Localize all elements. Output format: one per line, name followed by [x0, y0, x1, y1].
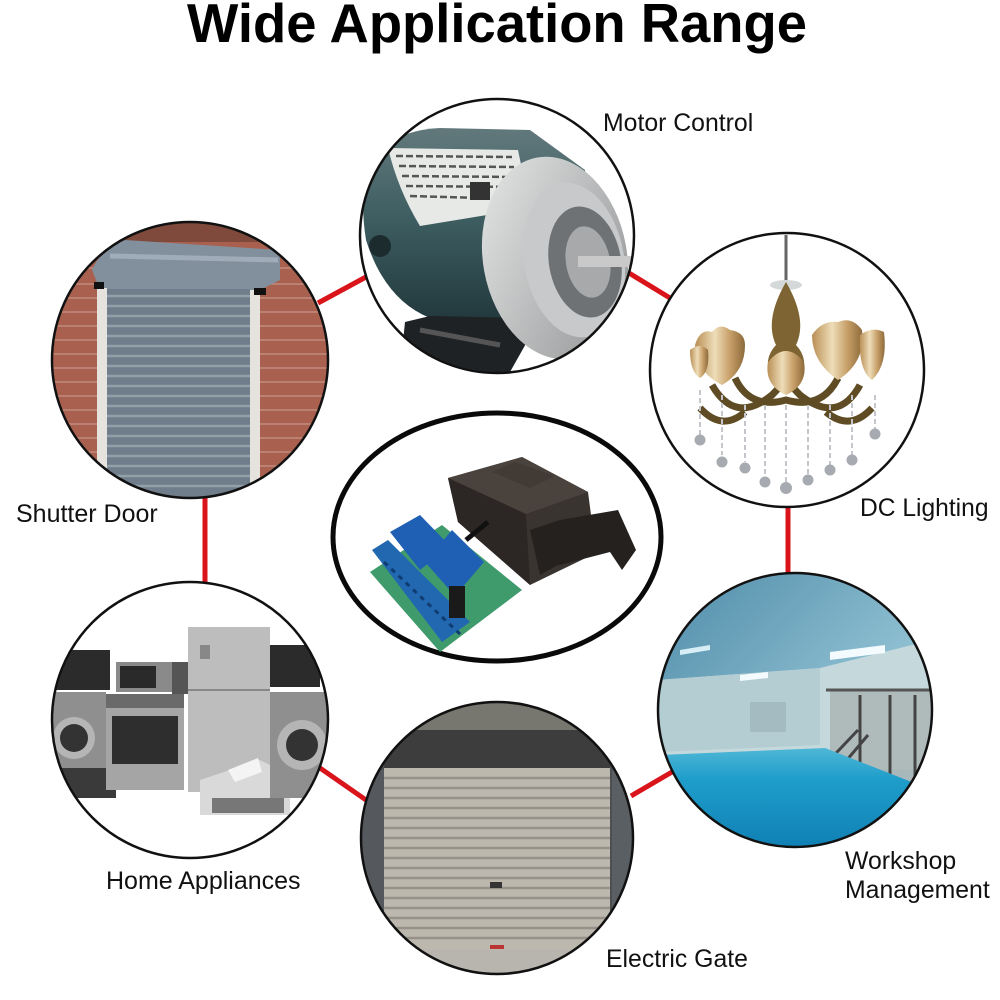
panel: motor control: [360, 99, 644, 373]
icon: motor end bell: [482, 156, 628, 358]
icon: chandelier: [690, 235, 885, 494]
label: electric gate: Electric Gate: [606, 946, 748, 973]
icon: motor foot: [400, 316, 528, 372]
icon: back wall: [658, 640, 932, 770]
icon: black enclosure: [448, 457, 636, 585]
icon: mezzanine stairs: [830, 692, 931, 782]
label: workshop management: Management: [845, 877, 990, 904]
icon: motor body: [363, 128, 590, 320]
icon: relay circuit board: [370, 515, 522, 652]
icon: shutter housing: [92, 240, 280, 290]
icon: rolling gate: [384, 768, 610, 950]
icon: refrigerator: [188, 627, 270, 792]
icon: oven: [106, 708, 184, 790]
icon: motor rating label: [388, 148, 530, 226]
panel: DC lighting: [650, 233, 924, 507]
panel: electric gate: [360, 702, 636, 980]
icon: blue floor: [666, 748, 910, 846]
red connecting ring: [205, 273, 788, 800]
icon: washer left: [53, 692, 106, 768]
icon: shutter slats: [107, 289, 250, 500]
icon: printer: [200, 760, 290, 815]
icon: washer right: [270, 692, 330, 798]
label: home appliances: Home Appliances: [106, 867, 301, 895]
panel: workshop management: [658, 573, 932, 850]
panel: central product: [333, 413, 661, 661]
label: shutter door: Shutter Door: [16, 500, 158, 528]
label: motor control: Motor Control: [603, 110, 753, 137]
icon: wall window: [750, 702, 786, 732]
panel: home appliances: [50, 582, 330, 858]
label: DC lighting: DC Lighting: [860, 495, 989, 522]
icon: enclosure clips: [530, 510, 636, 575]
icon: microwave: [116, 662, 172, 692]
label: workshop management: Workshop: [845, 848, 956, 875]
icon: ceiling lights: [830, 645, 885, 660]
panel: shutter door: [50, 220, 330, 500]
